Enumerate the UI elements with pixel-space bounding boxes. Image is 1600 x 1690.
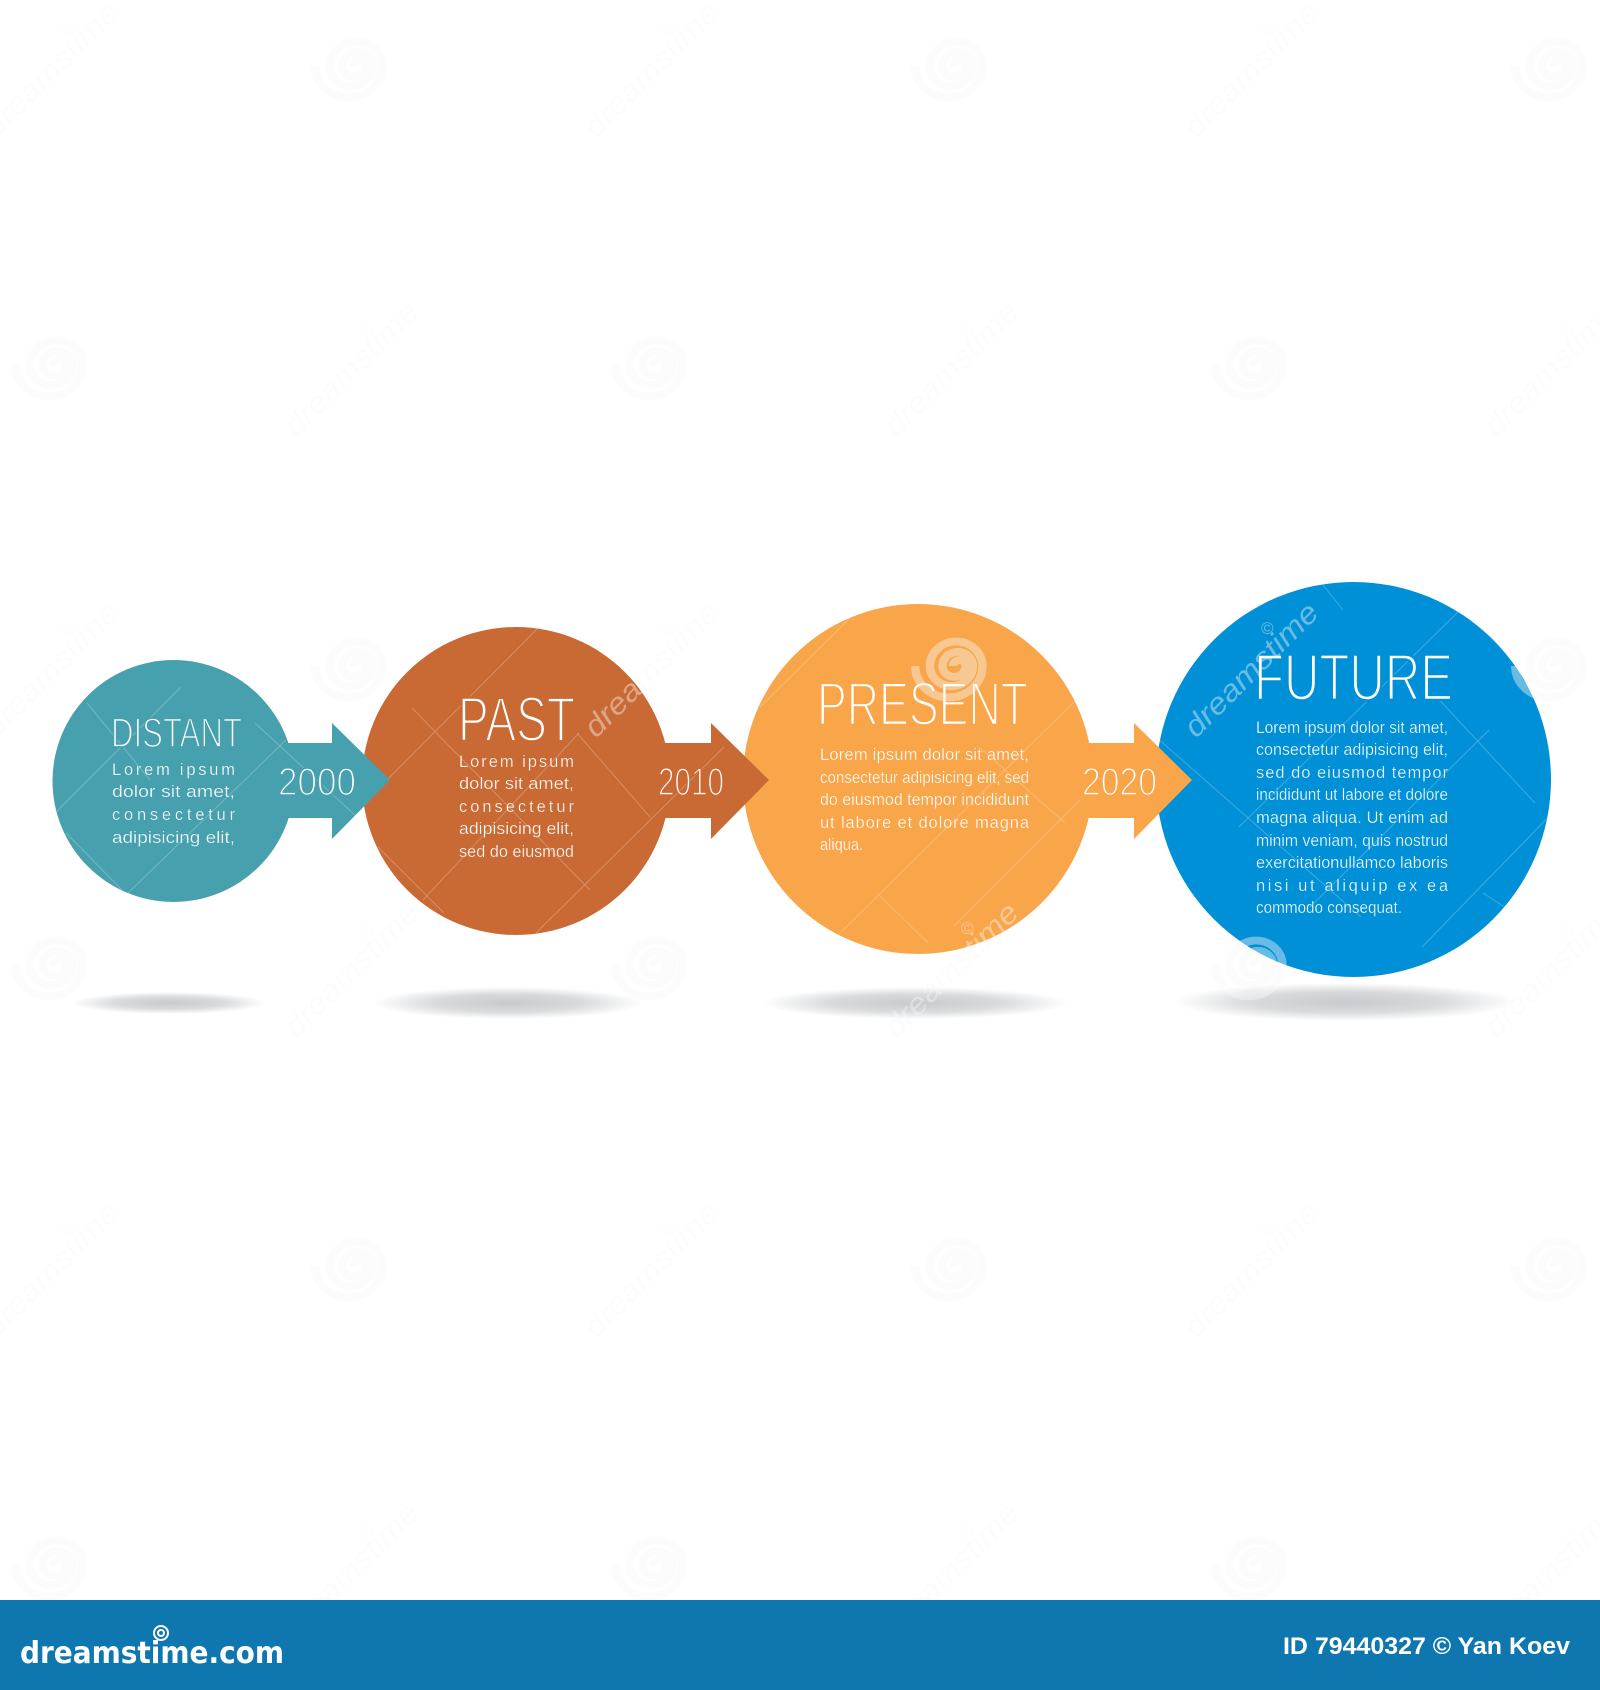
watermark pattern: dreamstime [278,896,425,1044]
watermark pattern: © [62,619,75,638]
text block: future: consectetur adipisicing elit, [1256,741,1448,759]
heading: future: FUTURE [1254,640,1453,714]
watermark pattern: © [1561,318,1574,337]
arrow: 2020 [1060,723,1192,839]
logo: dreamstime.com: dreamstime.com [20,1636,284,1671]
watermark pattern: dreamstime [1178,596,1325,744]
watermark pattern: © [1261,19,1274,38]
watermark pattern: © [961,318,974,337]
text block: distant: adipisicing elit, [112,829,235,847]
text block: present: do eiusmod tempor incididunt [820,791,1029,809]
panel: past [362,627,769,935]
text block: past: consectetur [459,798,574,816]
text block: past: Lorem ipsum [459,753,574,771]
arrow: 2010 [640,723,769,839]
text block: future: magna aliqua. Ut enim ad [1256,809,1448,827]
watermark pattern: © [661,619,674,638]
panel: future [1156,582,1565,977]
watermark pattern: dreamstime [878,295,1025,443]
footer bar [0,1600,1600,1690]
watermark pattern: © [661,1219,674,1238]
watermark pattern: © [661,19,674,38]
watermark pattern: dreamstime [878,896,1025,1044]
year label: 2020: 2020 [1082,761,1157,804]
watermark pattern: dreamstime [578,596,725,744]
year label: 2000: 2000 [278,761,356,804]
text block: future [1256,719,1449,917]
text block: distant: dolor sit amet, [112,783,235,801]
text block: future: Lorem ipsum dolor sit amet, [1256,719,1448,737]
arrow: 2000 [270,723,390,839]
heading: past: PAST [458,685,575,755]
panel: distant [52,660,390,902]
text block: future: incididunt ut labore et dolore [1256,786,1448,804]
watermark pattern: © [62,19,75,38]
shadow: distant [72,992,266,1014]
shadow: past [374,987,642,1019]
watermark pattern: © [62,1219,75,1238]
shadow: present [762,987,1068,1019]
text block: distant: Lorem ipsum [112,761,235,779]
text block: distant: consectetur [112,806,236,824]
watermark pattern: dreamstime [578,1196,725,1344]
text block: present [820,746,1030,854]
text block: present: aliqua. [820,836,863,854]
watermark pattern: © [961,919,974,938]
watermark pattern: © [961,1519,974,1538]
watermark pattern: dreamstime [1178,1196,1325,1344]
watermark pattern: © [361,318,374,337]
text block: future: sed do eiusmod tempor [1256,764,1448,782]
watermark pattern: dreamstime [878,1496,1025,1644]
text block: past: sed do eiusmod [459,843,574,861]
watermark pattern: © [361,1519,374,1538]
watermark pattern: © [1261,1219,1274,1238]
text block: future: exercitationullamco laboris [1256,854,1448,872]
text block: past [459,753,574,861]
text block: present: consectetur adipisicing elit, sed [820,769,1029,787]
icon: logo spiral [154,1626,168,1640]
watermark pattern: dreamstime [1178,0,1325,144]
text block: present: ut labore et dolore magna [820,814,1030,832]
heading: distant: DISTANT [111,709,242,756]
watermark pattern: dreamstime [578,0,725,144]
text block: future: minim veniam, quis nostrud [1256,832,1448,850]
year label: 2010: 2010 [658,761,724,804]
text block: past: dolor sit amet, [459,775,574,793]
watermark pattern: © [1561,919,1574,938]
text block: future: commodo consequat. [1256,899,1402,917]
panel: present [743,604,1192,954]
watermark pattern: dreamstime [278,1496,425,1644]
credit text: ID 79440327 © Yan Koev [1283,1633,1571,1660]
text block: past: adipisicing elit, [459,820,574,838]
watermark pattern: dreamstime [278,295,425,443]
text block: present: Lorem ipsum dolor sit amet, [820,746,1029,764]
shadow: future [1173,983,1517,1021]
text block: future: nisi ut aliquip ex ea [1256,877,1449,895]
text block: distant [112,761,236,847]
watermark pattern: © [1261,619,1274,638]
heading: present: PRESENT [817,670,1028,738]
watermark pattern: © [361,919,374,938]
